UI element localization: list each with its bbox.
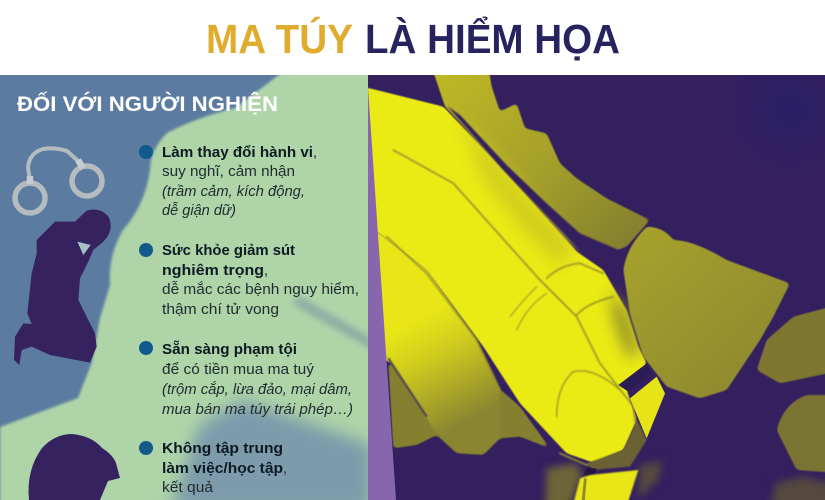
bullet 4: làm việc/học tập: [162, 461, 283, 477]
right dim fingers: [757, 303, 825, 383]
photo: yellow duotone fingers: [368, 75, 825, 500]
bottom lit fingers: [570, 470, 638, 500]
bullet 2: ,: [264, 263, 268, 279]
bullet 3: để có tiền mua ma tuý: [162, 362, 315, 378]
icon: handcuffs: [15, 148, 102, 213]
purple divider band: [368, 87, 396, 500]
dark fold under nail: [618, 363, 652, 392]
bullet 3: [139, 340, 353, 418]
middle finger: [378, 232, 500, 434]
index finger: [368, 87, 646, 462]
bullet 1: suy nghĩ, cảm nhận: [162, 164, 295, 180]
lower olive fingers: [388, 363, 550, 455]
bullet 1: Làm thay đổi hành vi: [162, 145, 313, 161]
title: [206, 15, 620, 62]
title: LÀ HIỂM HỌA: [365, 15, 620, 62]
bullet 2: [139, 243, 359, 318]
icon: kneeling figure: [14, 210, 111, 365]
dark crease between fingers: [448, 106, 620, 256]
bullet 2: nghiêm trọng: [162, 263, 264, 279]
crease lines: [387, 150, 637, 465]
bullet 2: Sức khỏe giảm sút: [162, 243, 295, 259]
bullet 4: Không tập trung: [162, 441, 283, 457]
bullet 1: dễ giận dữ): [162, 202, 236, 219]
bullet 2: thậm chí tử vong: [162, 302, 279, 318]
bullet 3: mua bán ma túy trái phép…): [162, 402, 353, 418]
thumb: [623, 227, 790, 398]
bullet 2: dễ mắc các bệnh nguy hiểm,: [162, 281, 359, 298]
fingertip shadow: [587, 420, 647, 470]
bullet 1: [139, 145, 317, 219]
bullet 1: (trầm cảm, kích động,: [162, 184, 305, 200]
heading: for addicts: ĐỐI VỚI NGƯỜI NGHIỆN: [17, 92, 278, 116]
icon: head silhouette: [29, 434, 120, 500]
bullet 4: ,: [283, 461, 287, 477]
panel: left background: [0, 70, 372, 500]
bullet 4: [139, 441, 287, 496]
soft shadow along index knuckle: [610, 290, 639, 357]
bullet 3: Sẵn sàng phạm tội: [162, 340, 297, 358]
upper olive finger: [434, 75, 649, 250]
crease under middle finger: [388, 358, 427, 417]
bullet 3: (trộm cắp, lừa đảo, mại dâm,: [162, 381, 352, 398]
lit sliver: [630, 377, 665, 438]
dim bottom finger: [545, 463, 582, 500]
bullet list: [139, 145, 359, 496]
title: MA TÚY: [206, 16, 353, 62]
bullet 1: ,: [313, 145, 317, 161]
bullet 4: kết quả: [162, 480, 214, 496]
